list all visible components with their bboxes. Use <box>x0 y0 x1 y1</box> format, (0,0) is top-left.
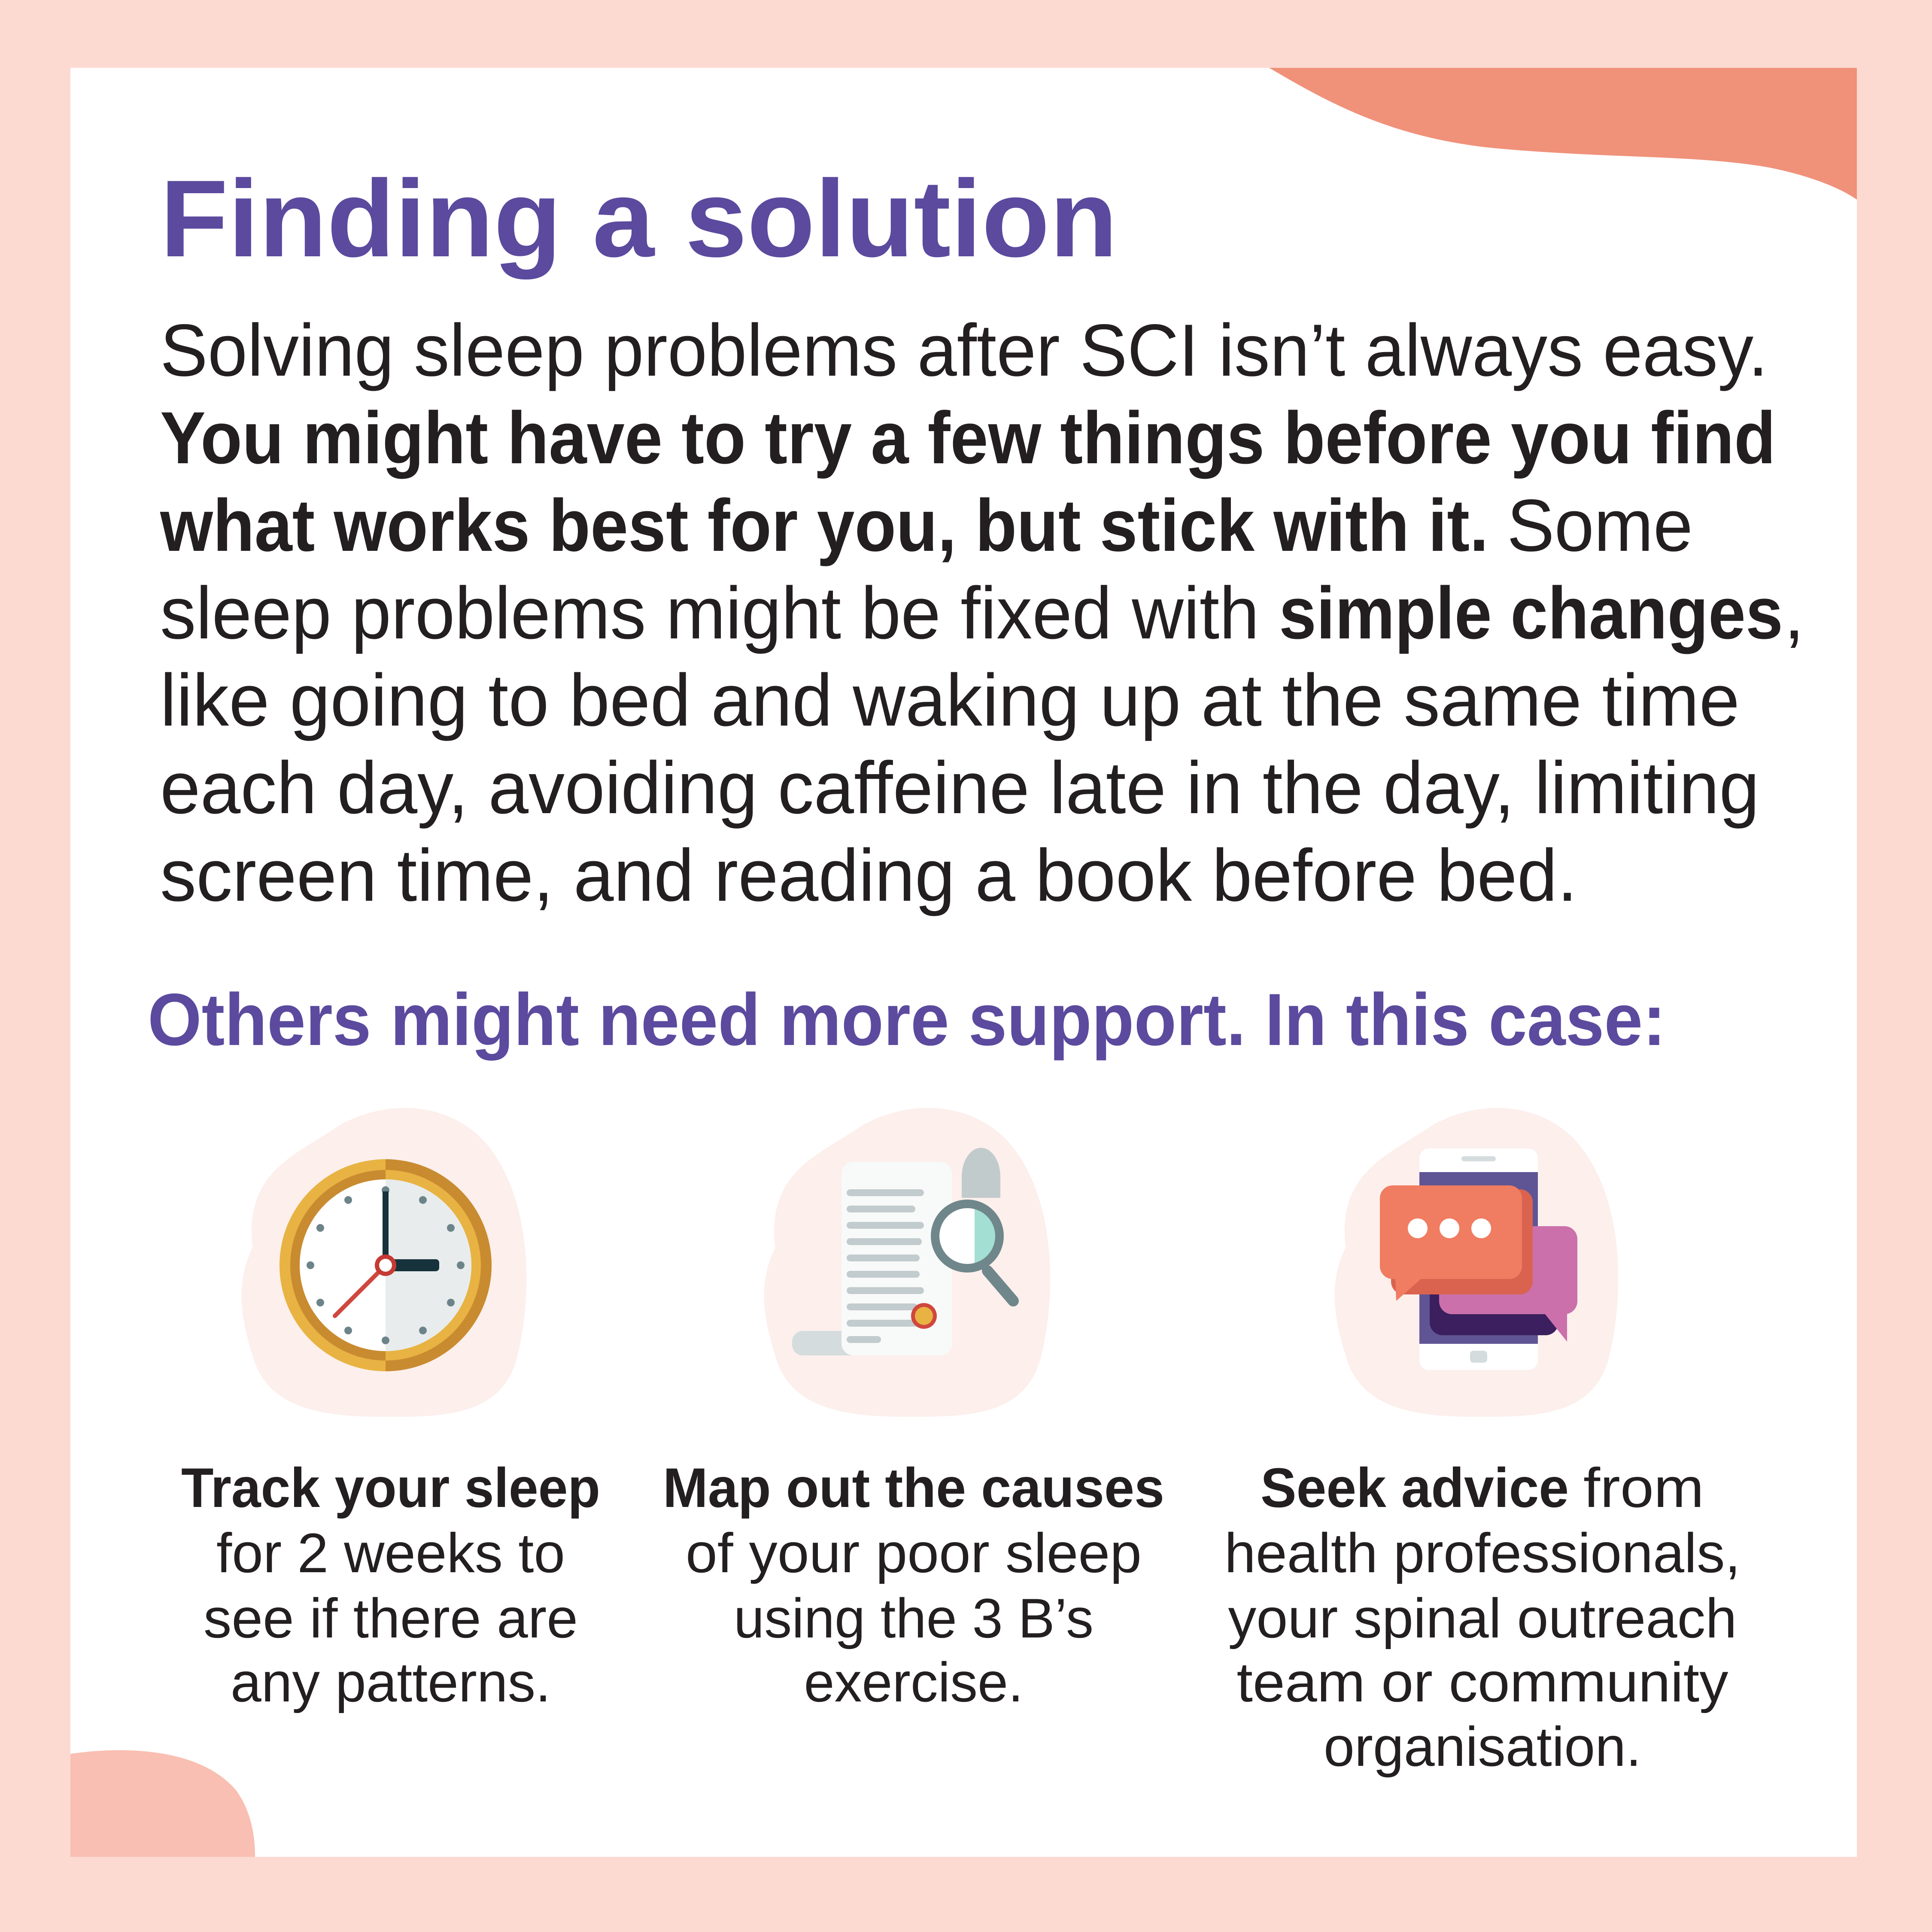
caption: seek advice <box>1224 1456 1741 1778</box>
intro text block: screen time, and reading a book before bed. <box>160 834 1577 917</box>
caption: track your sleep <box>181 1456 600 1713</box>
caption: seek advice: Seek advice <box>1261 1456 1569 1519</box>
caption: track your sleep: Track your sleep <box>181 1456 600 1519</box>
intro text block: what works best for you, but stick with it. <box>160 484 1488 567</box>
intro text block <box>160 309 1804 917</box>
caption: map out the causes <box>663 1456 1164 1713</box>
intro text block: , <box>1784 572 1804 654</box>
decorative blob: bottom left <box>70 1750 255 1857</box>
icon: document with magnifier <box>764 1108 1050 1417</box>
caption: seek advice: organisation. <box>1324 1715 1641 1778</box>
caption: map out the causes: exercise. <box>804 1651 1024 1713</box>
title: Finding a solution <box>160 158 1118 280</box>
intro text block: each day, avoiding caffeine late in the day, limiting <box>160 747 1759 829</box>
subheading: Others might need more support. In this case: <box>148 978 1666 1061</box>
intro text block: Some <box>1507 484 1693 567</box>
caption: track your sleep: any patterns. <box>231 1651 551 1713</box>
icon: clock <box>242 1108 526 1417</box>
caption: seek advice: from <box>1583 1456 1704 1519</box>
caption: map out the causes: using the 3 B’s <box>734 1587 1094 1649</box>
intro text block: simple changes <box>1279 572 1783 654</box>
caption: track your sleep: see if there are <box>204 1587 578 1649</box>
intro text block: sleep problems might be fixed with <box>160 572 1259 654</box>
caption: seek advice: your spinal outreach <box>1228 1587 1737 1649</box>
caption: map out the causes: of your poor sleep <box>686 1522 1142 1584</box>
caption: track your sleep: for 2 weeks to <box>216 1522 565 1584</box>
caption: seek advice: health professionals, <box>1224 1522 1741 1584</box>
caption: map out the causes: Map out the causes <box>663 1456 1164 1519</box>
caption: seek advice: team or community <box>1236 1651 1728 1713</box>
icon: phone with chat bubbles <box>1335 1108 1618 1417</box>
intro text block: like going to bed and waking up at the same time <box>160 659 1740 741</box>
intro text block: Solving sleep problems after SCI isn’t always easy. <box>160 309 1768 392</box>
intro text block: You might have to try a few things before you find <box>160 397 1776 479</box>
decorative blob: top right <box>1269 68 1857 200</box>
